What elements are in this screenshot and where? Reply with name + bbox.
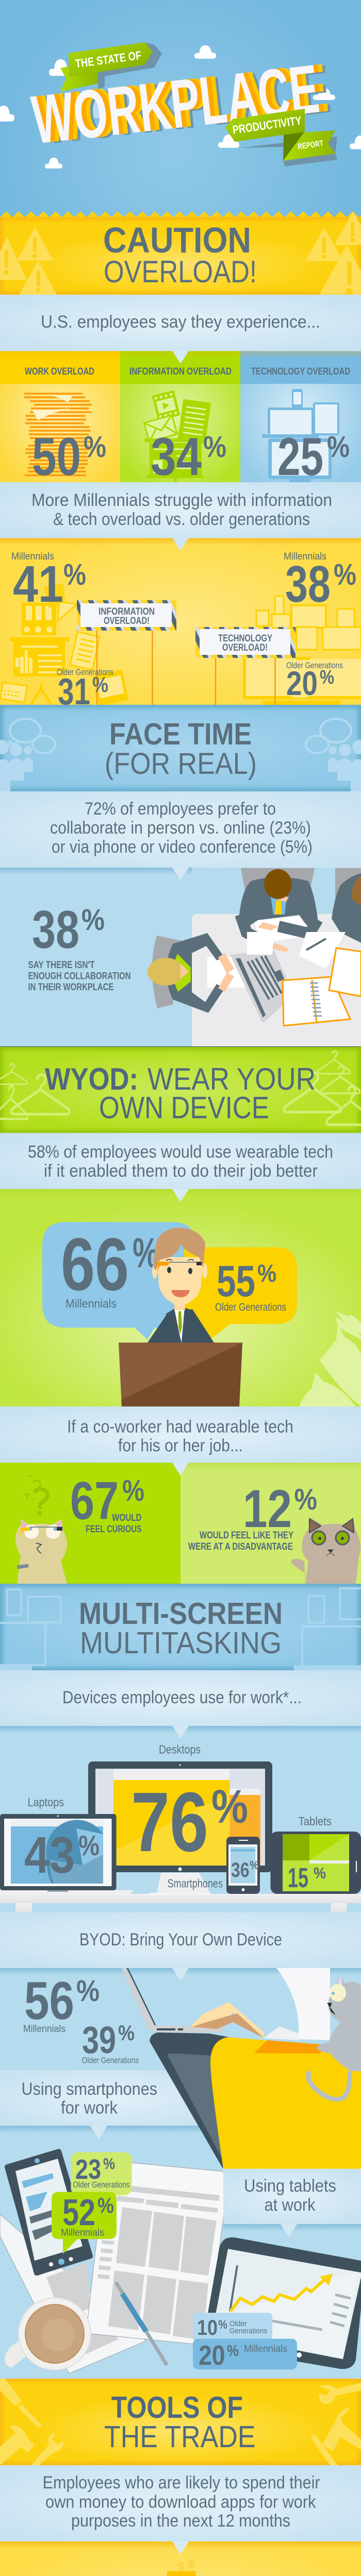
- stat: information overload 34%: 34: [151, 427, 202, 487]
- caption: more millennials: [0, 482, 361, 551]
- caption: using smartphones: [0, 2070, 217, 2139]
- bubble: older generations 10%: Older: [229, 2319, 247, 2328]
- caption: 72% prefer: or via phone or video conference (5%): [52, 837, 313, 857]
- panel: collaboration: [0, 868, 361, 1046]
- bubble: millennials: [42, 1222, 196, 1340]
- caption: employees who spend: own money to download apps for work: [45, 2493, 316, 2512]
- panel: devices on desk: [0, 1726, 361, 1912]
- bubble: older generations: Older Generations: [215, 1301, 286, 1313]
- illustration: laptop: [230, 950, 294, 1023]
- bubble: millennials 20%: [193, 2339, 297, 2371]
- caption: byod: [0, 1912, 361, 1981]
- stat: older generations 39%: [82, 2019, 139, 2065]
- stat: 12% disadvantage: 12: [243, 1479, 292, 1539]
- icon: download arrow with dollars: $: [188, 2557, 195, 2571]
- caption: using tablets: at work: [264, 2195, 316, 2215]
- icon: download arrow with dollars: $: [177, 2560, 185, 2574]
- icon: hangers: [0, 1051, 361, 1125]
- sign: information overload: INFORMATION: [99, 606, 155, 617]
- stat: millennials 56%: 56: [24, 1971, 74, 2031]
- caption: if a co-worker: [0, 1406, 361, 1476]
- ribbon: the state of: THE STATE OF: [74, 48, 142, 70]
- stat: older generations 39%: Older Generations: [82, 2056, 139, 2065]
- stat: older generations 20%: [286, 660, 343, 702]
- bubble: older generations: [184, 1247, 297, 1338]
- illustration: notebooks and pen: [247, 932, 361, 1026]
- bubble: millennials 52%: %: [97, 2193, 114, 2217]
- stat: 67% curious: FEEL CURIOUS: [86, 1524, 141, 1535]
- banner: caution overload: [0, 211, 361, 295]
- hero sky background: [0, 0, 361, 217]
- bubble: older generations 23%: Older Generations: [73, 2180, 130, 2190]
- illustration: tablet: %: [314, 1864, 326, 1882]
- sign: information overload: [77, 600, 176, 705]
- banner: wyod: WYOD:: [45, 1062, 138, 1096]
- banner: multi-screen multitasking: MULTI-SCREEN: [79, 1597, 283, 1631]
- caption: 72% prefer: 72% of employees prefer to: [85, 799, 276, 819]
- panel: curious cat: [0, 1463, 180, 1584]
- panel: overload columns: WORK OVERLOAD: [25, 366, 94, 377]
- stat: 12% disadvantage: WOULD FEEL LIKE THEY: [200, 1530, 293, 1541]
- label: smartphones: Smartphones: [167, 1876, 223, 1890]
- stat: 67% curious: WOULD: [112, 1513, 141, 1523]
- desk: [0, 1894, 361, 1912]
- icon: chat people: [9, 719, 351, 753]
- bubble: older generations 10%: [193, 2313, 272, 2341]
- stat: millennials 38%: %: [334, 558, 356, 591]
- illustration: man at table: [239, 868, 319, 952]
- caption: 72% prefer: [0, 791, 361, 880]
- caption: more millennials: & tech overload vs. older generations: [53, 510, 310, 529]
- icon: devices: [262, 389, 339, 482]
- stat: non app users 20%: [247, 2570, 345, 2576]
- bubble: millennials: 66: [61, 1223, 129, 1306]
- stat: 67% curious: %: [122, 1474, 144, 1507]
- stat: older generations 39%: %: [118, 2021, 135, 2045]
- icon: media and documents: [144, 390, 211, 482]
- illustration: podium: [119, 1343, 242, 1406]
- illustration: woman at table: [147, 933, 249, 1013]
- stat: millennials 41%: 41: [13, 555, 63, 613]
- caption: if a co-worker: If a co-worker had wearable tech: [67, 1417, 293, 1436]
- stat: millennials 56%: %: [76, 1974, 100, 2008]
- stat: 38% collaboration: 38: [32, 900, 79, 960]
- icon: tools: [0, 2379, 361, 2465]
- stat: 67% curious: 67: [70, 1471, 119, 1531]
- bubble: millennials: %: [133, 1230, 159, 1277]
- bubble: millennials 20%: %: [227, 2342, 239, 2360]
- stat: 12% disadvantage: [188, 1479, 317, 1552]
- ribbon: the state of: [60, 42, 162, 92]
- banner: face time: FACE TIME: [109, 717, 252, 751]
- illustration: desktop monitor: %: [211, 1781, 248, 1833]
- stat: older generations 39%: 39: [82, 2019, 116, 2061]
- banner: wyod: OWN DEVICE: [99, 1090, 269, 1125]
- sign: technology overload: OVERLOAD!: [222, 642, 268, 653]
- bubble: older generations 23%: %: [103, 2155, 115, 2173]
- stat: work overload 50%: %: [84, 430, 106, 464]
- caption: employees who spend: [0, 2465, 361, 2554]
- bubble: millennials 52%: 52: [62, 2192, 95, 2233]
- illustration: laptop: [0, 1814, 134, 1894]
- caption: 72% prefer: collaborate in person vs. online (23%): [50, 818, 311, 838]
- bubble: millennials 52%: Millennials: [61, 2228, 104, 2238]
- illustration: coffee cup: [5, 2298, 91, 2370]
- stat: older generations 31%: 31: [58, 671, 90, 713]
- stat: 12% disadvantage: WERE AT A DISADVANTAGE: [188, 1541, 293, 1552]
- panel: app download: [0, 2541, 361, 2576]
- stat: 38% collaboration: SAY THERE ISN'T: [28, 960, 95, 971]
- stat: millennials 38%: 38: [285, 555, 331, 613]
- bubble: older generations 23%: [71, 2153, 132, 2195]
- ribbon: productivity report: REPORT: [297, 139, 324, 151]
- cat silhouettes: [299, 1311, 361, 1406]
- banner: wyod: WEAR YOUR: [147, 1062, 316, 1096]
- illustration: laptop: 43: [24, 1826, 75, 1884]
- panel: overload columns: [0, 351, 361, 487]
- stat: millennials 38%: Millennials: [284, 551, 326, 562]
- label: desktops: Desktops: [159, 1742, 201, 1756]
- banner: tools of the trade: THE TRADE: [104, 2420, 256, 2454]
- bubble: older generations: %: [257, 1260, 276, 1287]
- stat: 38% collaboration: %: [81, 903, 105, 937]
- sign: technology overload: TECHNOLOGY: [218, 633, 272, 644]
- banner: wyod: [0, 1047, 361, 1133]
- stat: older generations 31%: [57, 667, 113, 713]
- banner: caution overload: CAUTION: [103, 220, 251, 260]
- illustration: tablet: [270, 1832, 361, 1894]
- stat: older generations 20%: 20: [286, 664, 318, 702]
- banner: tools of the trade: [0, 2379, 361, 2465]
- sign: technology overload: [195, 627, 296, 705]
- caption: using smartphones: for work: [61, 2098, 118, 2118]
- illustration: tablet: 15: [288, 1862, 308, 1893]
- panel: overload columns: INFORMATION OVERLOAD: [129, 366, 232, 377]
- ribbon: productivity report: PRODUCTIVITY: [232, 113, 302, 137]
- banner: tools of the trade: TOOLS OF: [111, 2391, 243, 2425]
- bubble: millennials 20%: 20: [199, 2340, 225, 2371]
- stat: older generations 31%: Older Generations: [57, 667, 113, 677]
- illustration: smartphone: [226, 1837, 260, 1894]
- caption: devices employees: [0, 1670, 361, 1739]
- illustration: woman far right: [332, 868, 361, 943]
- caption: more millennials: More Millennials struggle with information: [31, 490, 332, 510]
- stat: millennials 41%: %: [63, 558, 86, 591]
- stat: millennials 56%: Millennials: [23, 2024, 65, 2035]
- illustration: desktop monitor: 76: [131, 1775, 208, 1869]
- stat: technology overload 25%: %: [327, 430, 350, 464]
- caption: devices employees: Devices employees use for work*...: [62, 1688, 302, 1707]
- illustration: devices right: [244, 596, 361, 705]
- stat: older generations 20%: Older Generations: [286, 660, 343, 670]
- panel: millennials overload: [0, 538, 361, 713]
- illustration: man with smart glasses: [147, 1228, 214, 1343]
- bubble: millennials 52%: [52, 2192, 117, 2254]
- caption: using tablets: [223, 2169, 361, 2237]
- panel: wearable tech: [0, 1189, 361, 1407]
- illustration: desktop monitor: [88, 1761, 272, 1894]
- stat: information overload 34%: %: [203, 430, 226, 464]
- caption: using tablets: Using tablets: [244, 2176, 336, 2196]
- bubble: older generations 23%: 23: [75, 2154, 101, 2185]
- icon: paper stack: [24, 394, 92, 475]
- illustration: tablet chart: [204, 2238, 361, 2369]
- stat: 12% disadvantage: %: [294, 1483, 317, 1516]
- stat: millennials 41%: Millennials: [11, 551, 54, 562]
- caption: employees who spend: purposes in the next 12 months: [71, 2511, 290, 2531]
- bubble: older generations 10%: Generations: [229, 2327, 267, 2335]
- stat: older generations 20%: %: [320, 667, 334, 688]
- icon: device outlines: [0, 1588, 361, 1665]
- bubble: millennials 20%: Millennials: [244, 2344, 287, 2354]
- bubble: older generations 10%: 10: [197, 2315, 218, 2340]
- stat: work overload 50%: 50: [32, 427, 81, 487]
- illustration: office items left: [1, 583, 128, 706]
- caption: 58% wearable: [0, 1133, 361, 1202]
- stat: app users 37%: [19, 2570, 112, 2576]
- banner: multi-screen multitasking: MULTITASKING: [80, 1626, 282, 1660]
- meeting table: [192, 914, 361, 1046]
- illustration: papers: [0, 2160, 229, 2374]
- caption: 58% wearable: 58% of employees would use wearable tech: [28, 1142, 333, 1162]
- illustration: smartphone in hand: [7, 2151, 90, 2273]
- illustration: cat on sofa: [308, 1977, 361, 2099]
- banner: caution overload: OVERLOAD!: [104, 255, 257, 289]
- caption: employees who spend: Employees who are likely to spend their: [43, 2473, 320, 2493]
- sign: information overload: OVERLOAD!: [104, 616, 150, 626]
- banner: face time: [0, 705, 361, 791]
- label: laptops: Laptops: [28, 1795, 64, 1809]
- illustration: grumpy cat: [291, 1518, 360, 1584]
- illustration: smartphone: %: [250, 1858, 259, 1872]
- bubble: older generations: 55: [217, 1257, 255, 1306]
- banner: multi-screen multitasking: [0, 1584, 361, 1670]
- label: tablets: Tablets: [298, 1815, 332, 1828]
- panel: byod: [0, 1968, 361, 2379]
- panel: grumpy cat: [180, 1463, 361, 1584]
- caption: byod: BYOD: Bring Your Own Device: [79, 1930, 282, 1950]
- banner: face time: (FOR REAL): [105, 747, 257, 781]
- illustration: curious cat: [15, 1519, 67, 1584]
- stat: 38% collaboration: [28, 900, 131, 993]
- stat: 38% collaboration: IN THEIR WORKPLACE: [28, 982, 113, 993]
- bubble: older generations 10%: %: [218, 2318, 227, 2332]
- caption: using smartphones: Using smartphones: [22, 2079, 157, 2099]
- caption: U.S. employees: U.S. employees say they experience...: [41, 312, 320, 332]
- caption: U.S. employees: [0, 295, 361, 364]
- clouds: [0, 45, 361, 168]
- illustration: smartphone: 36: [231, 1859, 250, 1882]
- icon: download arrow with dollars: [131, 2557, 231, 2576]
- illustration: laptop: %: [78, 1829, 100, 1861]
- caption: if a co-worker: for his or her job...: [118, 1436, 243, 1455]
- ribbon: productivity report: [225, 109, 337, 166]
- stat: 38% collaboration: ENOUGH COLLABORATION: [28, 971, 131, 982]
- illustration: person on sofa with laptop: [122, 1968, 361, 2169]
- bubble: millennials: Millennials: [65, 1297, 117, 1310]
- stat: older generations 31%: %: [92, 672, 108, 697]
- stat: technology overload 25%: 25: [277, 427, 323, 487]
- caption: 58% wearable: if it enabled them to do their job better: [44, 1161, 318, 1181]
